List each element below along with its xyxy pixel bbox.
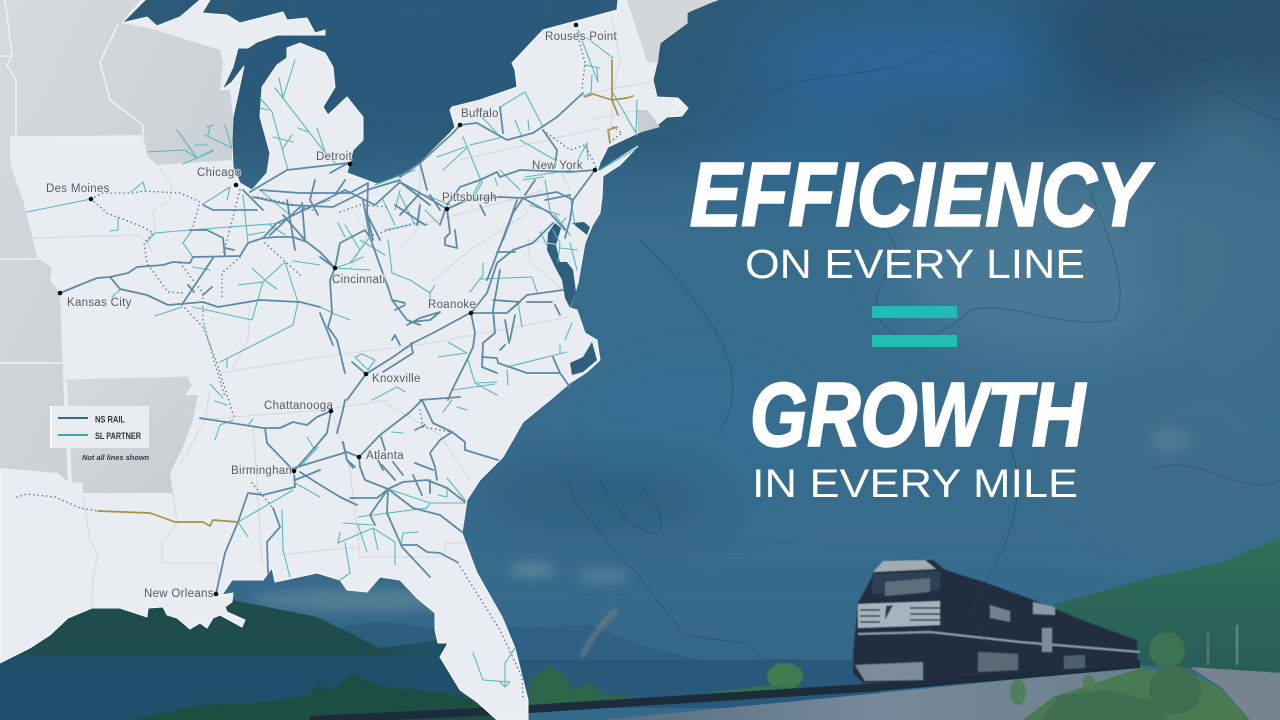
road: [1190, 667, 1280, 720]
city labels and markers: Rouses Point: [545, 31, 618, 43]
rail network: NS rail lines: [60, 93, 595, 594]
legend: NS RAIL: [95, 414, 125, 424]
city labels and markers: Chattanooga: [264, 400, 333, 412]
grass verge: [1023, 668, 1250, 720]
subhead: in every mile: IN EVERY MILE: [752, 462, 1078, 506]
rail network: future gold lines: [98, 60, 633, 526]
city labels and markers: Atlanta: [366, 450, 404, 462]
city labels and markers: Detroit: [316, 151, 352, 163]
neighbouring grey states: [0, 0, 718, 493]
city labels and markers: Pittsburgh: [442, 192, 497, 204]
city labels and markers: Cincinnati: [332, 274, 386, 286]
city labels and markers: Roanoke: [428, 299, 476, 311]
state borders: [32, 20, 650, 608]
right hillside: [1053, 538, 1280, 672]
distant hills and water: [0, 600, 880, 720]
city labels and markers: Buffalo: [461, 108, 499, 120]
legend: SL PARTNER: [95, 431, 141, 441]
rail network: dotted trackage rights: [17, 33, 622, 700]
legend: Not all lines shown: [82, 455, 149, 462]
roadside trees: [1010, 625, 1238, 720]
topographic contour lines: [567, 20, 1280, 660]
city labels and markers: New Orleans: [144, 588, 214, 600]
city labels and markers: Des Moines: [46, 183, 110, 195]
legend: [50, 406, 149, 462]
locomotive train: [853, 560, 1140, 683]
rainbow: [582, 610, 617, 657]
equals sign: [872, 306, 957, 347]
headline: growth: GROWTH: [750, 366, 1087, 466]
city labels and markers: New York: [532, 160, 583, 172]
headline: efficiency: EFFICIENCY: [690, 146, 1154, 246]
rail line: [310, 664, 1140, 720]
city labels and markers: Knoxville: [372, 373, 421, 385]
ballast track bed: [600, 667, 1150, 720]
city labels and markers: Kansas City: [67, 297, 132, 309]
rail network: SL partner lines: [27, 30, 637, 687]
city labels and markers: Chicago: [197, 167, 241, 179]
city labels and markers: [46, 23, 618, 600]
map land: eastern United States: [0, 0, 718, 720]
foreground trees: [130, 663, 804, 720]
city labels and markers: Birmingham: [231, 465, 295, 477]
subhead: on every line: ON EVERY LINE: [745, 241, 1085, 287]
